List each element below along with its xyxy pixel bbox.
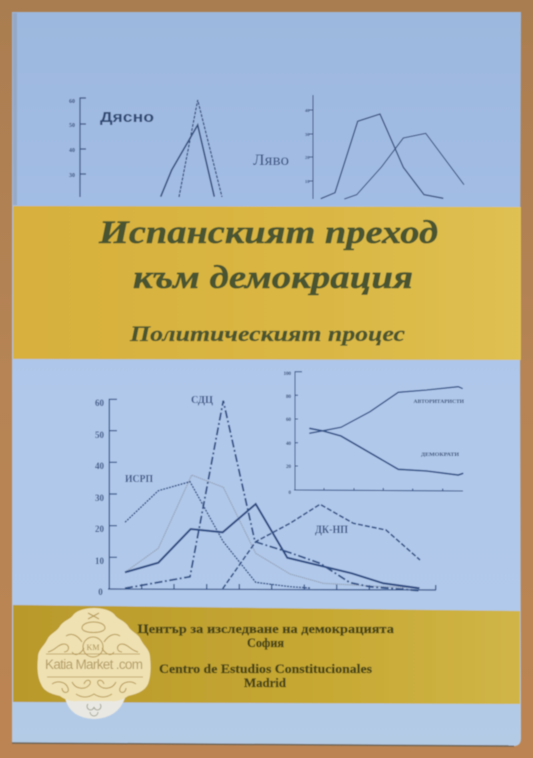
chart: Дясно bbox=[69, 98, 222, 197]
chart: Ляво: 40 bbox=[305, 108, 310, 113]
series: ДК-НП bbox=[223, 504, 420, 589]
series: grey dotted bbox=[125, 475, 420, 588]
title: Испанският преход bbox=[98, 215, 438, 251]
inset line chart: 80 bbox=[286, 395, 292, 400]
axis numbers: 50 bbox=[95, 430, 104, 440]
chart: Дясно: 60 bbox=[69, 99, 75, 105]
title bbox=[98, 215, 438, 296]
chart: Дясно: 50 bbox=[69, 123, 75, 129]
chart: Ляво bbox=[253, 95, 464, 199]
spine shadow bbox=[13, 13, 17, 205]
series labels: СДЦ bbox=[191, 395, 213, 406]
inset line chart: 60 bbox=[286, 418, 292, 423]
series labels: ИСРП bbox=[125, 474, 153, 485]
series: ИСРП bbox=[125, 482, 310, 588]
publisher text: Madrid bbox=[244, 675, 287, 690]
axis numbers: 40 bbox=[95, 461, 104, 471]
publisher text: Centro de Estudios Constitucionales bbox=[159, 661, 372, 676]
chart: Ляво: 10 bbox=[305, 179, 310, 184]
inset line chart: 0 bbox=[288, 491, 292, 496]
inset line chart: 40 bbox=[286, 442, 292, 447]
yellow title band bbox=[13, 206, 521, 360]
axis numbers: 0 bbox=[98, 587, 103, 597]
publisher text: София bbox=[247, 635, 284, 650]
watermark badge: Katia Market .com bbox=[45, 657, 143, 672]
bottom edge shadow bbox=[12, 743, 514, 746]
axis numbers: 20 bbox=[95, 524, 104, 534]
inset line chart: 20 bbox=[286, 465, 292, 470]
series: solid bbox=[125, 504, 419, 588]
series: СДЦ bbox=[125, 401, 420, 591]
axis numbers: 10 bbox=[95, 556, 104, 566]
axis numbers: 60 bbox=[95, 398, 104, 408]
chart: Дясно: Дясно bbox=[100, 109, 154, 126]
watermark badge bbox=[37, 608, 151, 719]
chart: Ляво: Ляво bbox=[253, 152, 289, 169]
title: към демокрация bbox=[133, 260, 413, 296]
inset line chart bbox=[284, 372, 465, 496]
publisher text: Център за изследване на демокрацията bbox=[138, 621, 395, 636]
inset line chart: 100 bbox=[284, 372, 292, 377]
publisher text bbox=[138, 621, 395, 690]
main line chart bbox=[95, 395, 436, 597]
chart: Ляво: 20 bbox=[305, 155, 310, 160]
watermark badge: KM bbox=[87, 643, 99, 652]
chart: Ляво: 30 bbox=[305, 132, 310, 137]
axis numbers bbox=[95, 398, 104, 597]
inset line chart: ДЕМОКРАТИ bbox=[421, 452, 460, 458]
chart: Дясно: 30 bbox=[69, 173, 75, 179]
axis numbers: 30 bbox=[95, 493, 104, 503]
yellow publisher band bbox=[13, 605, 520, 704]
chart: Дясно: 40 bbox=[69, 148, 75, 154]
inset line chart: АВТОРИТАРИСТИ bbox=[414, 399, 465, 405]
series labels: ДК-НП bbox=[315, 524, 348, 536]
subtitle: Политическият процес bbox=[129, 321, 405, 346]
series labels bbox=[125, 395, 348, 536]
